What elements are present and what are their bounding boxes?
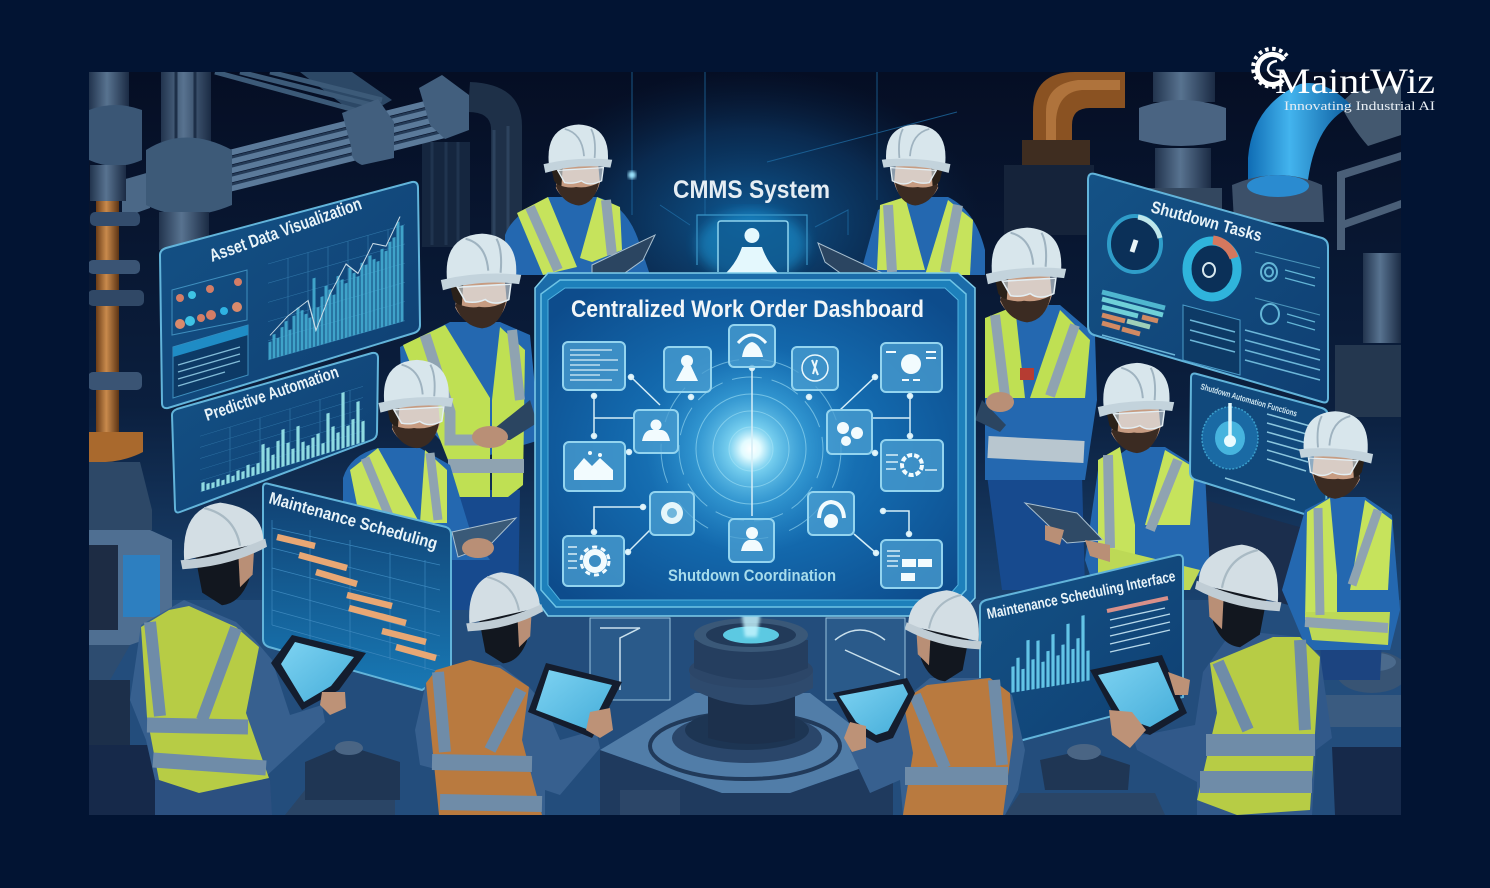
worker: mid right [985,228,1097,590]
tablet: top right [818,243,882,275]
bolted floor block: right [1005,744,1165,815]
node: layout blocks [881,540,942,588]
node: group badge [650,492,694,535]
heading: dashboard title: Centralized Work Order Dashboard [571,296,924,323]
tablet: top left [592,235,655,275]
panel: centralized work order dashboard [535,273,975,616]
tablet: foreground centre right [833,678,915,743]
node: team [634,410,678,453]
light beam [738,590,764,637]
interface schedule rows [1107,598,1170,652]
title: cmms system: CMMS System [673,176,830,204]
node: work order table [563,342,625,390]
node: analytics swirl [827,410,872,454]
caption: shutdown coordination: Shutdown Coordination [668,567,836,585]
asset status dots [172,270,247,335]
asset bar chart [268,215,405,360]
heading: predictive automation: Predictive Automation [202,362,341,425]
logo wordmark: MaintWiz [1275,61,1435,101]
worker: lower right facing [1085,363,1210,590]
node: terrain [564,442,625,491]
worker: foreground far right [1133,545,1332,815]
floor shadow patches [89,745,1401,815]
interface bar chart [1013,615,1088,693]
machinery behind central unit [590,618,905,700]
panel: secondary diagnostics [1190,374,1328,520]
machine: right side [1205,500,1408,727]
hands: lower right worker [1045,525,1110,562]
panel: shutdown tasks [1088,174,1328,402]
shutdown task list [1102,320,1320,380]
panel: maintenance scheduling [263,484,451,690]
glowing node [628,171,636,179]
radar dial [1202,403,1258,469]
hand: foreground centre right [844,722,866,752]
logo: MaintWiz [1253,49,1435,113]
node: arc sensor [808,492,854,535]
illustration scene [88,70,1408,815]
node: settings ring [881,440,943,491]
worker: top left [505,125,650,275]
machine: left housing [89,530,172,745]
worker: top right [860,125,985,275]
node: status card [881,343,942,392]
tablet: mid right worker [975,400,1006,432]
shutdown task table [1183,305,1240,375]
worker: foreground centre right [850,590,1025,815]
node: person [664,347,711,392]
tablet: mid left worker [496,400,534,440]
worker: foreground far left [130,503,325,815]
hand: mid right worker [986,392,1014,412]
heading: maintenance scheduling interface: Maintenance Scheduling Interface [985,568,1177,623]
hand: foreground centre left [586,708,613,738]
floor [89,600,1401,815]
background glow behind cmms title [558,90,941,272]
thin holographic lines [632,72,957,235]
worker: mid left [400,234,540,610]
hand: mid left worker [472,426,508,448]
node: gear [563,536,624,586]
diagnostics text rows [1225,414,1310,500]
node: circular emblem [792,347,838,390]
gantt grid [272,520,440,672]
node: bell [729,325,775,367]
gauge: ring chart [1187,240,1237,297]
heading: maintenance scheduling: Maintenance Scheduling [267,489,440,553]
hand: lower left worker [462,538,494,558]
pipework: left [88,72,522,530]
tablet: foreground far right [1090,655,1187,735]
connector lines [592,366,912,556]
bolted floor block: left [285,741,400,815]
tablet: foreground centre left [528,663,622,738]
node: operator [729,519,774,562]
tablet: lower right worker [1025,503,1103,543]
central glow [646,344,856,554]
tablet: foreground far left [271,635,366,710]
radial rings [661,359,841,539]
small dials [1255,252,1320,330]
predictive bar chart [200,386,363,492]
worker: far right facing [1282,411,1400,680]
worker: foreground centre left [415,572,600,815]
hand: foreground far left [320,692,346,715]
heading: secondary diagnostics: Shutdown Automation Functions [1199,381,1299,419]
panel: predictive automation [172,353,378,512]
heading: asset data visualization: Asset Data Visualization [207,194,364,266]
pipework: right [1004,72,1401,417]
icon: user [726,228,778,273]
panel: asset data visualization [160,182,420,408]
hands: foreground far right [1109,672,1190,748]
tablet: lower left worker [452,518,516,557]
cmms icon frame [697,211,807,279]
worker: lower left facing [343,360,490,560]
panel: maintenance scheduling interface [980,555,1183,752]
gauge: left dial [1109,216,1161,272]
icon: gear [1253,49,1287,87]
asset data table [173,325,248,398]
shutdown task bars [1102,292,1165,334]
central machine [600,618,893,815]
heading: shutdown tasks: Shutdown Tasks [1149,198,1264,245]
logo tagline: Innovating Industrial AI [1284,98,1435,113]
gantt bars [277,537,436,658]
